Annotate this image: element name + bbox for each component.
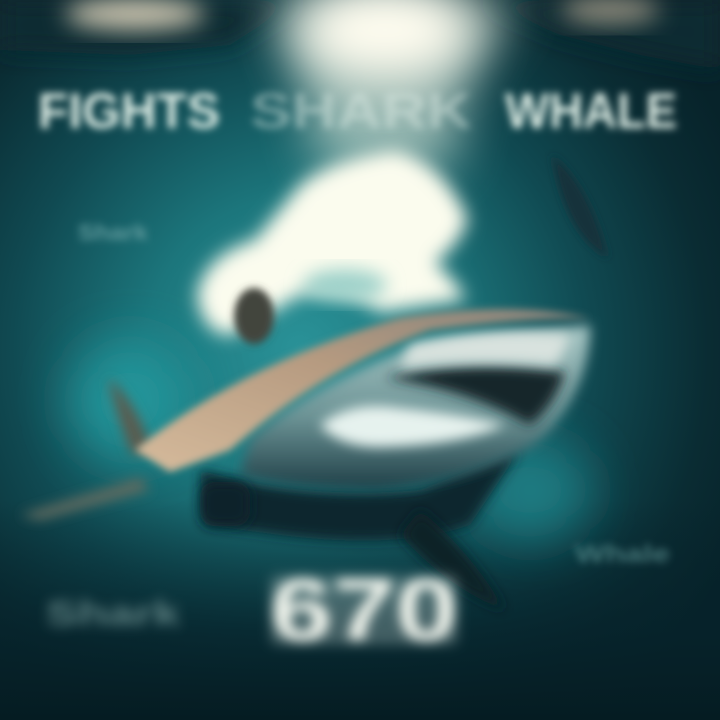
title: WHALE <box>505 83 677 139</box>
caption: bottom left: Shark <box>46 595 180 633</box>
shark back <box>135 309 590 472</box>
shark upper jaw highlight <box>400 332 570 368</box>
shark lower shadow <box>200 450 520 541</box>
shark mouth <box>385 366 565 425</box>
title: FIGHTS <box>38 83 220 139</box>
dark feather shape <box>552 155 608 258</box>
pectoral fin <box>400 510 505 610</box>
surface light and dark edges <box>0 0 720 170</box>
title <box>38 83 677 139</box>
shark belly highlight <box>320 406 505 447</box>
shark <box>20 309 590 610</box>
title: SHARK <box>250 83 472 139</box>
light patch in cloud <box>303 269 387 301</box>
white cloud of light <box>197 150 468 335</box>
centre stat block: 670 <box>270 560 458 659</box>
small figure on shark <box>234 288 274 344</box>
caption: bottom right: Whale <box>575 541 670 568</box>
caption: upper left: Shark <box>78 220 149 245</box>
dark rear fin <box>200 482 250 526</box>
shark tail fin <box>108 378 152 455</box>
shark tail spear <box>20 478 150 520</box>
shark body <box>240 325 590 490</box>
